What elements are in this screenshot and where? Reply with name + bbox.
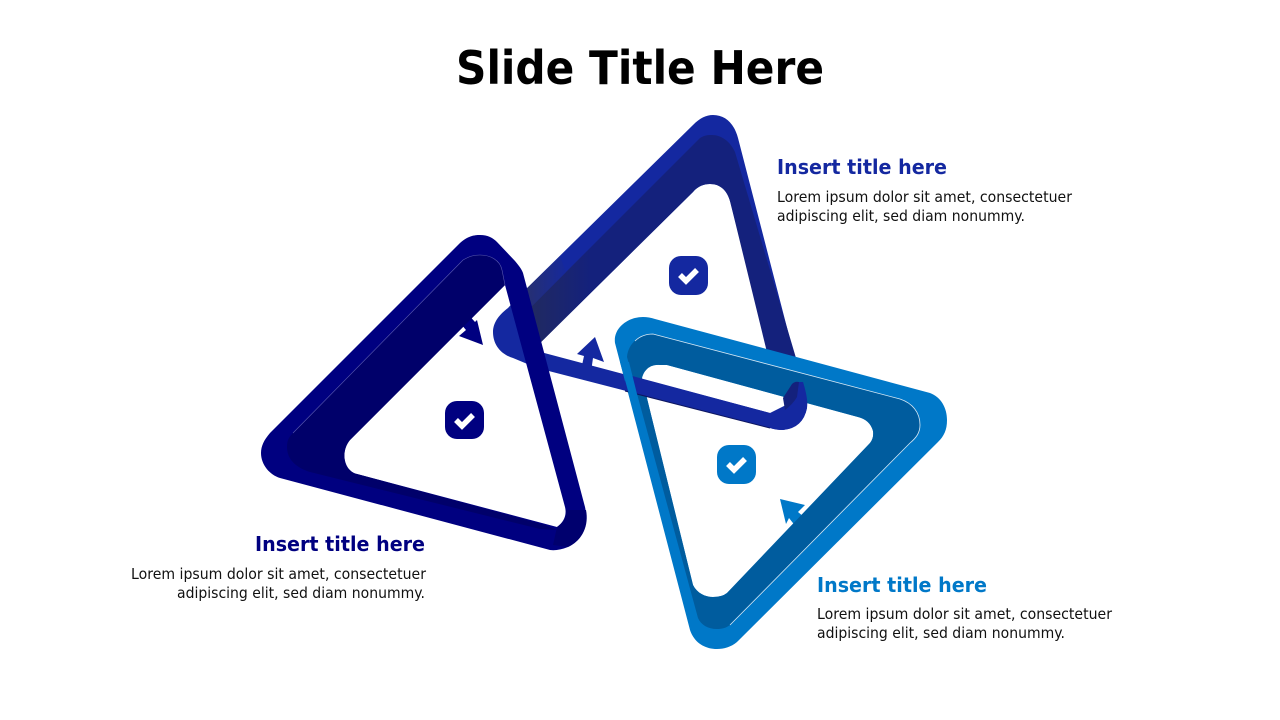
- text block: top right: adipiscing elit, sed diam nonummy.: [777, 207, 1025, 225]
- inner curl: [783, 382, 799, 410]
- triangle 3 hairline: [635, 334, 920, 625]
- triangle 3 left strip over strip: [620, 362, 638, 398]
- triangle 1 right shade: [553, 510, 587, 547]
- triangle 3: light blue ring: [615, 317, 947, 649]
- arrow: triangle 3: [780, 499, 810, 532]
- triangle 3 outer shape: [615, 317, 947, 649]
- triangle 3 band: [627, 334, 920, 629]
- triangle 2 light strip left fade: [518, 256, 566, 314]
- strip shadow: [625, 391, 770, 428]
- text block: bottom left: [131, 532, 427, 602]
- triangle 1 outer shape: [261, 235, 586, 550]
- text block: bottom right: Insert title here: [817, 573, 987, 597]
- arrow: triangle 2: [577, 337, 604, 372]
- text block: top right: Lorem ipsum dolor sit amet, consectetuer: [777, 188, 1073, 206]
- arrow: triangle 1: [456, 312, 483, 345]
- triangle 2: blue ring: [493, 115, 807, 430]
- text block: bottom left: Lorem ipsum dolor sit amet, consectetuer: [131, 565, 427, 583]
- text block: bottom right: Lorem ipsum dolor sit amet, consectetuer: [817, 605, 1113, 623]
- text block: top right: Insert title here: [777, 155, 947, 179]
- title: Slide Title Here: [456, 41, 824, 95]
- triangle 2 outer shape: [493, 115, 807, 430]
- check badge 3: [717, 445, 756, 484]
- check badge 1: [445, 401, 484, 439]
- text block: bottom left: adipiscing elit, sed diam nonummy.: [177, 584, 425, 602]
- triangle 2 strip and curl over triangle 3: [625, 374, 807, 430]
- strip and curl: [625, 374, 807, 430]
- triangle 1 band: [287, 255, 557, 530]
- text block: bottom right: adipiscing elit, sed diam nonummy.: [817, 624, 1065, 642]
- triangle 2 band: [524, 135, 802, 385]
- text block: top right: [777, 155, 1073, 225]
- check badge 2: [669, 256, 708, 295]
- triangle 1: navy ring: [261, 235, 587, 550]
- triangle 1 hairline: [293, 255, 505, 433]
- text block: bottom right: [817, 573, 1113, 642]
- text block: bottom left: Insert title here: [255, 532, 425, 556]
